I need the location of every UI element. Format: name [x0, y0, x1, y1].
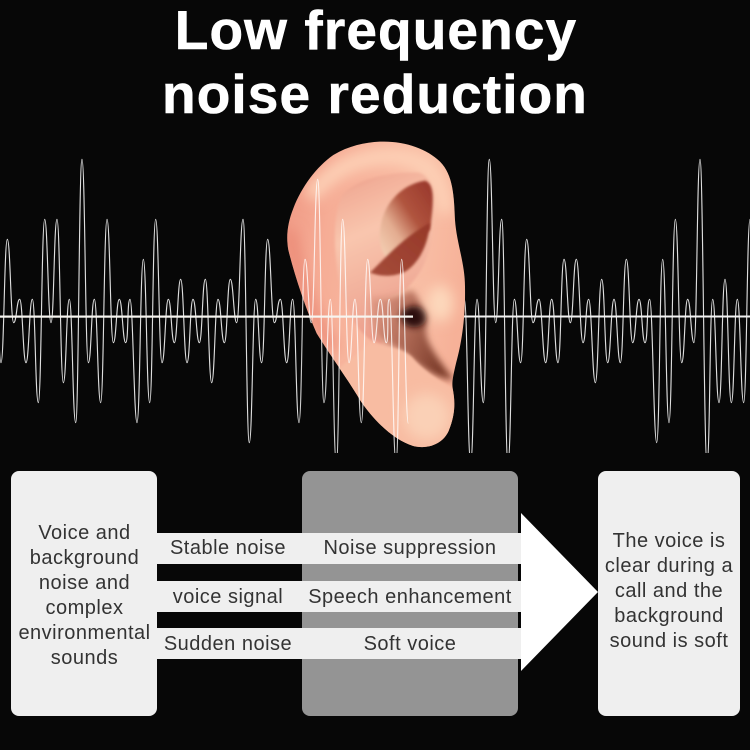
sound wave: right of ear [464, 159, 750, 463]
panel: input sounds [11, 471, 157, 716]
row: voice signal to speech enhancement: voice signal [173, 586, 283, 608]
upper concha shadow [380, 181, 433, 258]
baseline: right of ear [460, 316, 750, 318]
row: sudden noise to soft voice: Sudden noise [164, 633, 292, 655]
left rim redness [290, 230, 333, 350]
lower concha shadow [370, 223, 430, 276]
concha floor [369, 290, 454, 380]
panel: input sounds: background [30, 547, 139, 569]
tragus highlight [427, 285, 453, 322]
row: sudden noise to soft voice [157, 628, 521, 659]
icon: ear [287, 142, 466, 448]
row: sudden noise to soft voice: Soft voice [364, 633, 456, 655]
title: Low frequency [175, 0, 577, 61]
lobe lower highlight [403, 393, 450, 440]
ear base skin [287, 142, 466, 448]
panel: result: call and the [615, 580, 723, 602]
panel: input sounds: sounds [51, 647, 118, 669]
arrow [521, 513, 598, 671]
panel: input sounds: complex [46, 597, 123, 619]
row: stable noise to noise suppression [157, 533, 521, 564]
baseline: left and over ear [0, 316, 413, 318]
panel: input sounds: noise and [39, 572, 130, 594]
row: stable noise to noise suppression: Stable noise [170, 537, 286, 559]
panel: processing [302, 471, 518, 716]
panel: result: clear during a [605, 555, 733, 577]
panel: result: sound is soft [610, 630, 728, 652]
canal darkest spot [401, 306, 427, 327]
sound wave: left of ear [0, 159, 299, 443]
lobe [340, 348, 454, 448]
title: noise reduction [162, 63, 588, 125]
panel: result: The voice is [613, 530, 725, 552]
panel: result [598, 471, 740, 716]
panel: result: background [614, 605, 724, 627]
sound wave: over ear [299, 179, 408, 463]
title [162, 0, 588, 125]
panel: input sounds: environmental [18, 622, 151, 644]
inner bowl [335, 173, 434, 343]
helix highlight [310, 157, 445, 213]
row: voice signal to speech enhancement: Speech enhancement [308, 586, 512, 608]
row: voice signal to speech enhancement [157, 581, 521, 612]
panel: input sounds: Voice and [38, 522, 131, 544]
row: stable noise to noise suppression: Noise suppression [323, 537, 497, 559]
